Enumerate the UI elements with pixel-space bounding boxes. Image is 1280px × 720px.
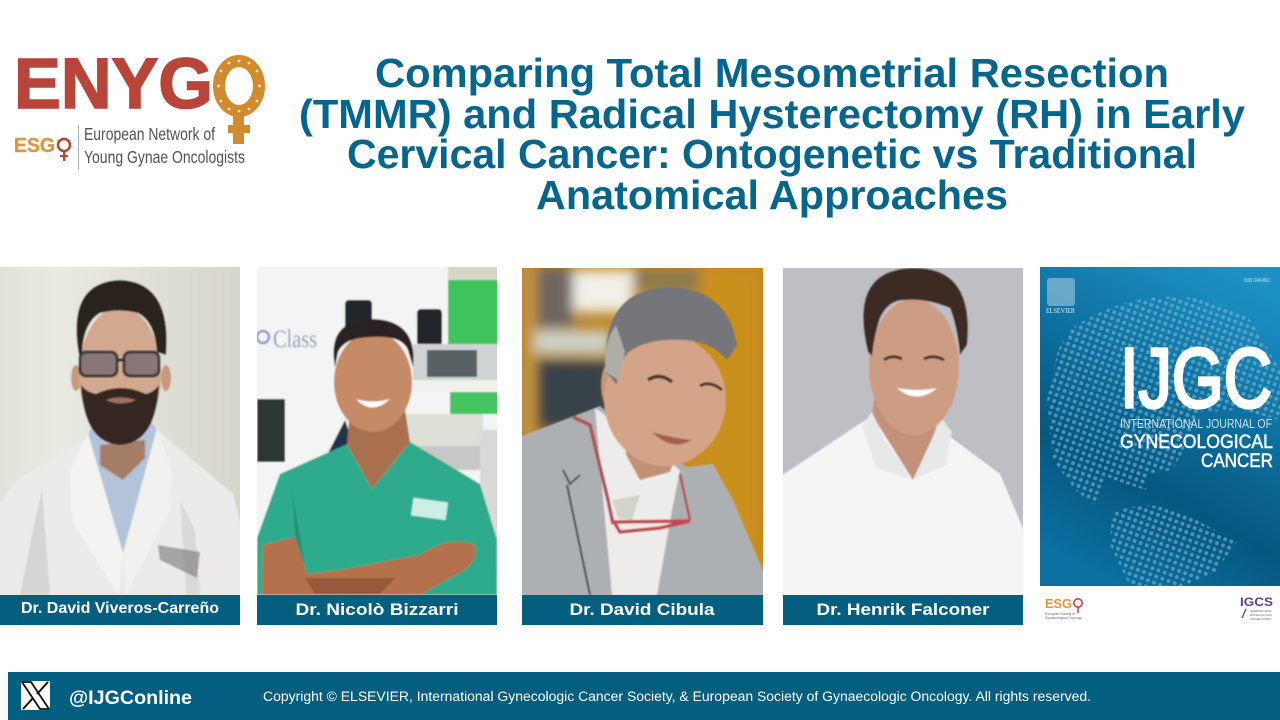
logo: ENYGO	[14, 45, 261, 169]
caption: Dr. Henrik Falconer	[816, 600, 990, 619]
photo: Dr. Cibula	[517, 262, 765, 600]
ESGO logo: ESG	[1045, 596, 1072, 611]
ESGO small logo: ESG	[14, 135, 55, 157]
photo: Dr. Falconer	[778, 263, 1030, 600]
social handle: @IJGConline	[69, 688, 192, 709]
caption bar	[522, 595, 763, 625]
logo wordmark: ENYG	[14, 45, 213, 124]
caption: Dr. David Viveros-Carreño	[21, 600, 219, 617]
title	[299, 50, 1245, 218]
title: Cervical Cancer: Ontogenetic vs Traditional	[347, 131, 1197, 177]
panel: Dr. Henrik Falconer	[778, 263, 1030, 625]
caption bar	[0, 595, 240, 625]
IGCS logo: CANCER SOCIETY	[1250, 617, 1272, 621]
ESGO logo	[1045, 596, 1082, 620]
journal name: GYNECOLOGICAL	[1120, 432, 1273, 453]
logo subtitle: Young Gynae Oncologists	[84, 147, 245, 167]
logo subtitle: European Network of	[84, 124, 215, 144]
ESGO logo: Gynaecological Oncology	[1045, 616, 1082, 620]
photo: Dr. Viveros-Carreño	[0, 262, 245, 600]
footer bar	[8, 672, 1280, 720]
journal name	[1120, 419, 1273, 468]
cover artwork	[1040, 267, 1280, 586]
copyright: Copyright © ELSEVIER, International Gynecologic Cancer Society, & European Society of Gynaecologic Oncology. All rights reserved.	[263, 689, 1091, 704]
icon: X logo	[21, 681, 50, 710]
title: Anatomical Approaches	[536, 172, 1008, 218]
IGCS logo: GYNECOLOGIC	[1250, 613, 1273, 617]
caption: Dr. Nicolò Bizzarri	[296, 600, 458, 619]
IGCS logo: INTERNATIONAL	[1250, 609, 1272, 613]
caption: Dr. David Cibula	[570, 600, 715, 619]
title: Comparing Total Mesometrial Resection	[375, 50, 1169, 96]
ESGO logo: European Society of	[1045, 612, 1076, 616]
ESGO small logo	[14, 135, 70, 161]
title: (TMMR) and Radical Hysterectomy (RH) in Early	[299, 91, 1245, 137]
caption bar	[783, 595, 1023, 625]
photo: Dr. Bizzarri: Class	[273, 326, 317, 353]
journal cover: IJGC	[1040, 267, 1280, 621]
caption bar	[257, 595, 497, 625]
photo: Dr. Bizzarri	[252, 262, 502, 600]
journal name: CANCER	[1201, 451, 1273, 472]
panel: Dr. David Cibula	[517, 262, 765, 625]
IGCS logo: IGCS	[1240, 595, 1273, 609]
IGCS logo	[1240, 595, 1273, 621]
publisher: ELSEVIER	[1046, 307, 1075, 315]
icon: female symbol with stars	[217, 60, 261, 144]
globe dot map	[1047, 297, 1280, 586]
icon: Elsevier tree	[1047, 278, 1075, 306]
panel: Dr. David Viveros-Carreño	[0, 262, 245, 625]
panel: Dr. Nicolò Bizzarri	[252, 262, 502, 625]
